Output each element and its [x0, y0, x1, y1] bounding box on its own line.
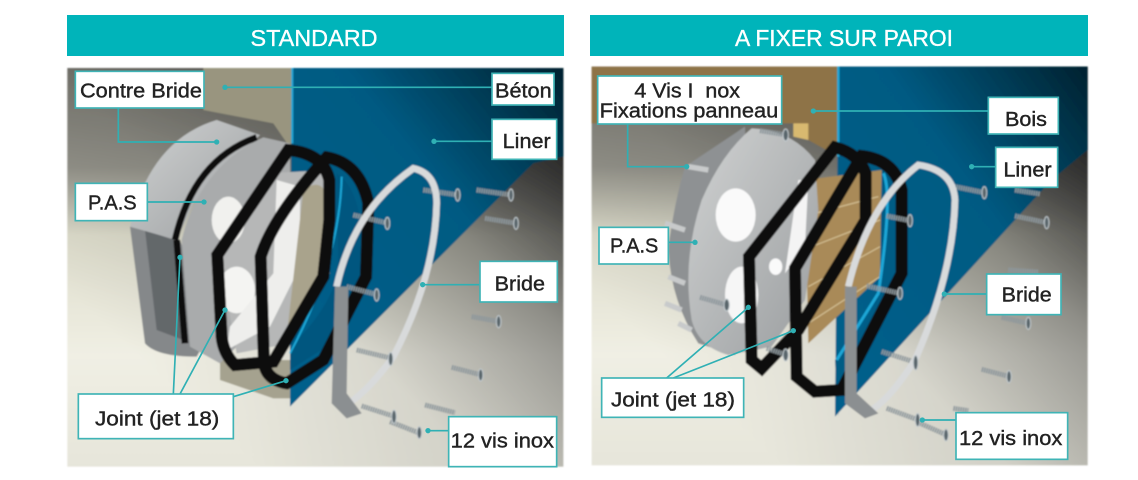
label: bois: Bois [1005, 108, 1047, 131]
label: 4 vis inox fixations panneau: Fixations panneau [600, 99, 778, 122]
label: bois [988, 97, 1058, 134]
label: joint: Joint (jet 18) [611, 389, 735, 412]
label: joint [602, 378, 744, 417]
heading: a fixer sur paroi [590, 15, 1088, 56]
label: contre bride [75, 71, 204, 108]
leader lines: standard [118, 85, 492, 433]
label: bride: Bride [495, 273, 545, 296]
label: 12 vis inox: 12 vis inox [451, 430, 555, 453]
label: 4 vis inox fixations panneau: 4 Vis I nox [634, 79, 741, 102]
label: contre bride: Contre Bride [80, 79, 202, 102]
label: bride: Bride [1002, 283, 1052, 306]
heading: standard [67, 15, 564, 56]
label: p.a.s: P.A.S [88, 191, 137, 214]
label: bride [987, 274, 1061, 315]
label: joint: Joint (jet 18) [95, 408, 219, 431]
label: 4 vis inox fixations panneau [598, 76, 782, 124]
illustration: exploded standard assembly [67, 68, 563, 467]
label: joint [78, 394, 233, 439]
label: p.a.s [75, 183, 147, 221]
label: béton: Béton [495, 79, 552, 102]
label: 12 vis inox [956, 413, 1068, 459]
leader lines: wall-mounted [628, 108, 996, 423]
label: liner [492, 119, 557, 159]
label: 12 vis inox: 12 vis inox [959, 427, 1063, 450]
panel: wall-mounted diagram [592, 67, 1088, 465]
label: bride [480, 261, 557, 302]
label: p.a.s [599, 227, 668, 264]
heading: standard: STANDARD [250, 25, 378, 51]
label: 12 vis inox [449, 417, 557, 467]
label: liner: Liner [1003, 159, 1052, 182]
panel: standard diagram [67, 68, 563, 467]
label: p.a.s: P.A.S [610, 234, 658, 257]
label: béton [492, 73, 554, 105]
heading: a fixer sur paroi: A FIXER SUR PAROI [735, 25, 953, 51]
label: liner: Liner [503, 130, 551, 153]
illustration: exploded wall-mounted assembly [592, 67, 1088, 465]
label: liner [996, 147, 1058, 187]
